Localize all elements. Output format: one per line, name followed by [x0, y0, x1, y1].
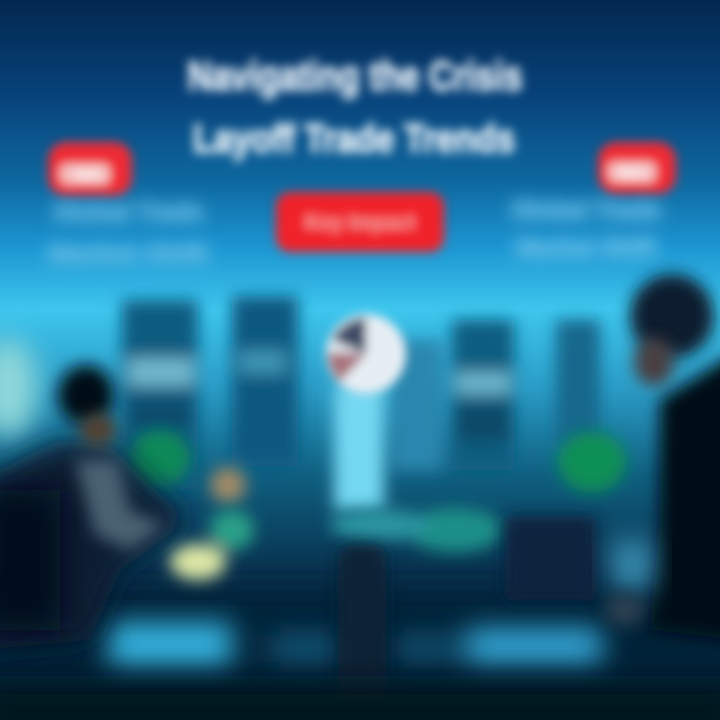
laptop right: [505, 516, 597, 600]
central pie icon: [326, 314, 406, 394]
desk glow panels: [108, 622, 602, 666]
chart on desk: [170, 510, 254, 580]
city skyline: [122, 296, 600, 490]
center red button: Key Impact: [305, 212, 415, 234]
right caption: Market Shift: [516, 235, 656, 262]
left caption: [48, 199, 208, 268]
title: Layoff Trade Trends: [193, 117, 515, 161]
central light column: [334, 385, 384, 510]
left red badge: NO.: [76, 167, 104, 184]
right red badge: [598, 142, 676, 194]
bottom shadow: [0, 685, 720, 720]
desk surface: [0, 590, 720, 720]
left glow: [0, 338, 38, 438]
green charts: [130, 430, 626, 552]
title: [188, 52, 522, 161]
right person: [605, 274, 720, 640]
center figure: [338, 545, 386, 715]
left caption: Global Trade: [53, 199, 203, 226]
right caption: [511, 197, 661, 262]
right red badge: NO.: [620, 165, 648, 182]
left caption: Market Shift: [48, 241, 208, 268]
title: Navigating the Crisis: [188, 52, 522, 99]
left person: [0, 365, 246, 650]
center red button: [276, 192, 444, 252]
right caption: Global Trade: [511, 197, 661, 224]
left red badge: [48, 142, 132, 196]
